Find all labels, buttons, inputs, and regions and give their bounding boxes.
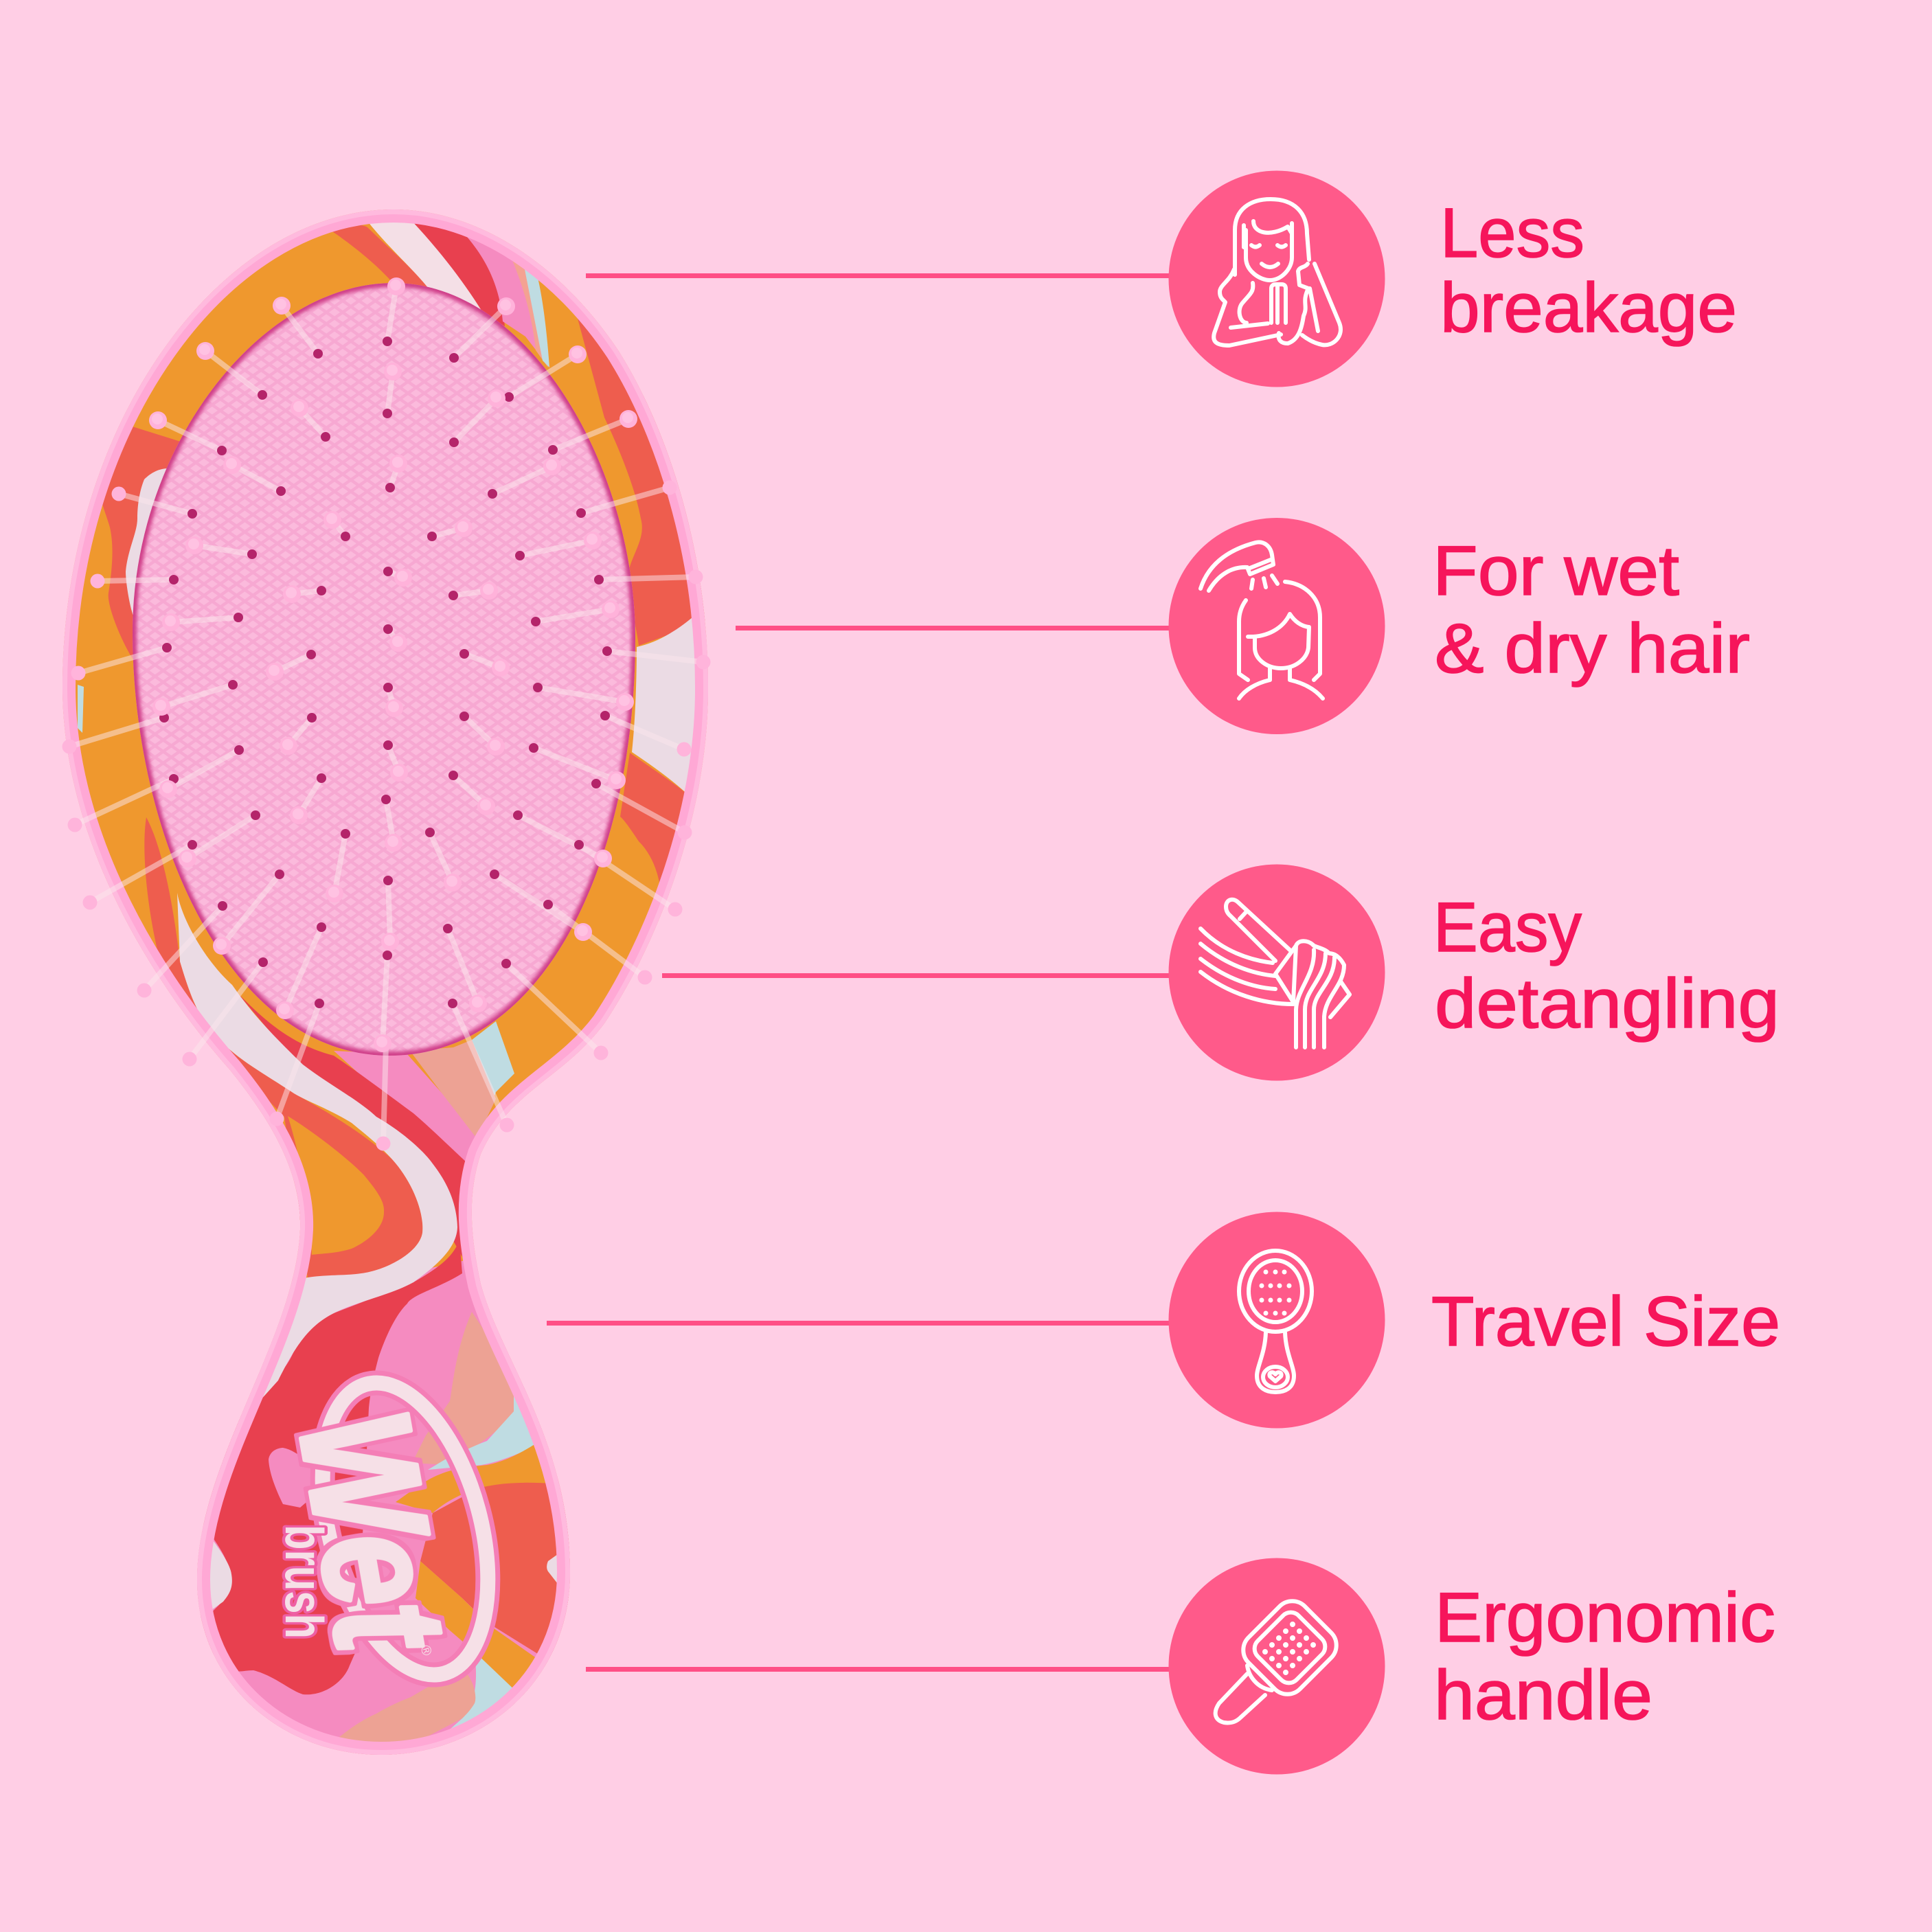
connector line: ergonomic handle xyxy=(586,1667,1170,1672)
icon: paddle brush xyxy=(1169,1558,1385,1775)
pad rim shadow xyxy=(133,283,635,1056)
rim of the body xyxy=(62,209,708,1755)
text: Easy detangling: detangling xyxy=(1435,964,1780,1043)
text: Easy detangling: Easy xyxy=(1433,888,1582,966)
lower head right stripes xyxy=(472,1021,514,1096)
text: Ergonomic handle: Ergonomic xyxy=(1435,1578,1775,1657)
top swirls xyxy=(332,225,429,288)
text: For wet & dry hair xyxy=(1433,532,1750,687)
logo word brush: brush xyxy=(274,1525,334,1639)
left side swirls xyxy=(101,424,181,659)
text: Less breakage: Less xyxy=(1440,194,1584,272)
text: Ergonomic handle xyxy=(1434,1578,1775,1734)
connector line: wet and dry hair xyxy=(736,626,1170,630)
bristle holes xyxy=(164,341,607,1003)
right side swirls xyxy=(577,316,714,646)
feature: travel size xyxy=(1169,1212,1780,1429)
brush body print xyxy=(41,192,728,1786)
text: Ergonomic handle: handle xyxy=(1434,1656,1652,1734)
text: Less breakage: breakage xyxy=(1440,269,1737,347)
text: For wet & dry hair: & dry hair xyxy=(1435,609,1750,687)
text: Travel Size: Travel Size xyxy=(1431,1282,1780,1361)
Wet Brush logo xyxy=(264,1365,517,1693)
connector line: easy detangling xyxy=(662,973,1170,978)
text: For wet & dry hair: For wet xyxy=(1433,532,1679,610)
feature: ergonomic handle xyxy=(1169,1558,1775,1775)
icon: comb through hair xyxy=(1169,864,1385,1081)
bristle stems xyxy=(69,286,703,1144)
neck swirls xyxy=(144,817,422,1277)
icon: shower over head xyxy=(1169,518,1385,734)
icon: small round brush xyxy=(1169,1212,1385,1429)
brush product illustration xyxy=(41,192,728,1786)
logo oval xyxy=(293,1365,517,1693)
feature: less breakage xyxy=(1169,170,1737,387)
feature: easy detangling xyxy=(1169,864,1780,1081)
connector line: travel size xyxy=(547,1321,1170,1326)
feature: for wet and dry hair xyxy=(1169,518,1750,734)
cushion pad with mesh xyxy=(133,283,635,1056)
handle base and colour fields xyxy=(213,1261,537,1738)
text: Less breakage xyxy=(1440,194,1737,347)
registered mark: ® xyxy=(417,1644,435,1658)
icon: woman brushing hair xyxy=(1169,170,1385,387)
logo word Wet: Wet xyxy=(264,1398,481,1667)
bristle ball tips xyxy=(69,285,703,1144)
connector line: less breakage xyxy=(586,273,1170,278)
text: Easy detangling xyxy=(1433,888,1780,1043)
